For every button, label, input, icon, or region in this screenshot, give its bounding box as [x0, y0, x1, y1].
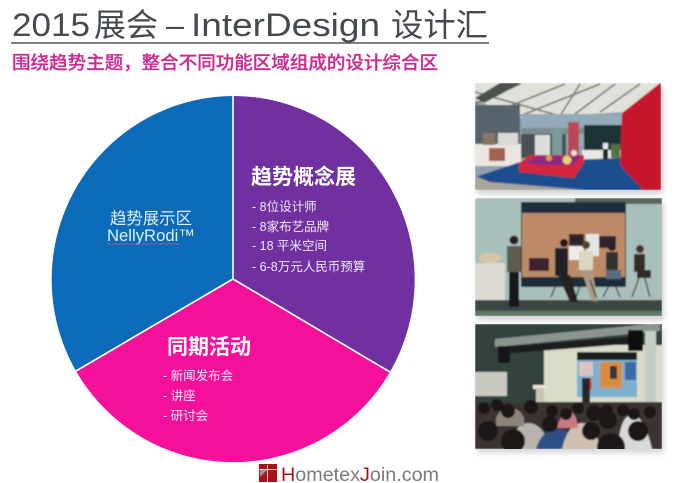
label: concurrent events: - 研讨会 — [163, 409, 209, 423]
photo: lecture audience — [475, 323, 664, 461]
label: concurrent events: - 新闻发布会 — [163, 368, 234, 383]
pie chart — [52, 96, 415, 462]
photo: exhibition hall — [475, 83, 663, 194]
label: trend display area: 趋势展示区 — [110, 210, 192, 228]
segment: trend concept exhibition — [233, 96, 415, 372]
label: trend concept exhibition: - 8家布艺品牌 — [252, 219, 329, 234]
label: concurrent events: 同期活动 — [167, 336, 251, 359]
label: trend display area: NellyRodi™ — [107, 226, 195, 245]
title — [11, 7, 489, 43]
label: concurrent events: - 讲座 — [163, 388, 196, 403]
icon: logo mark — [259, 464, 277, 482]
photo: panel discussion — [475, 198, 664, 320]
subtitle: 围绕趋势主题，整合不同功能区域组成的设计综合区 — [12, 53, 438, 73]
title: – — [166, 7, 184, 43]
label: trend concept exhibition — [251, 165, 365, 274]
title: 2015 — [12, 7, 90, 43]
title: InterDesign — [191, 7, 380, 43]
label: concurrent events — [163, 336, 251, 423]
segment: trend display area — [52, 96, 233, 371]
label: trend concept exhibition: - 8位设计师 — [252, 199, 317, 214]
label: trend concept exhibition: - 18 平米空间 — [252, 239, 327, 253]
title: 展会 — [94, 7, 158, 43]
segment: concurrent events — [76, 279, 390, 462]
title: 设计汇 — [391, 7, 488, 43]
label: trend concept exhibition: - 6-8万元人民币预算 — [252, 259, 365, 274]
label: trend display area — [107, 210, 195, 245]
label: trend concept exhibition: 趋势概念展 — [251, 165, 356, 189]
